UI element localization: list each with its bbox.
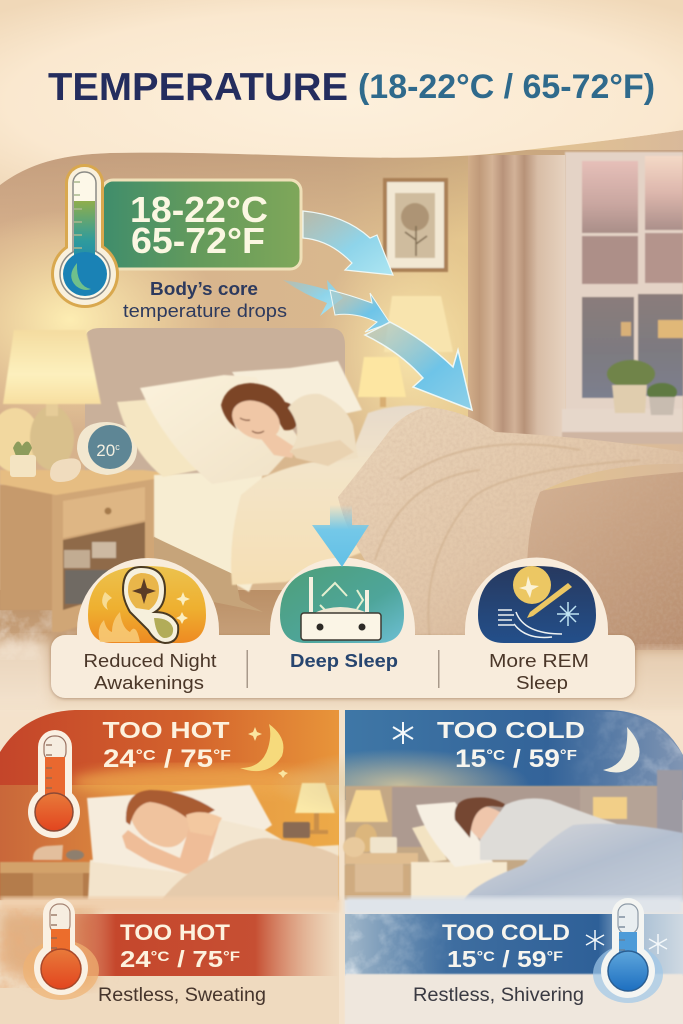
heading: too cold top: 15 [455,745,483,773]
caption: restless sweating: Restless, Sweating [98,984,266,1006]
top banner [0,0,683,185]
benefit: deep sleep: Deep Sleep [290,651,398,671]
benefit: reduced night awakenings: Reduced Night [84,651,216,671]
heading: too hot top: 24 [103,745,131,773]
cold sky [345,710,683,800]
heading: too cold top: TOO COLD [437,717,585,743]
cold sky frost [560,712,683,795]
benefit: more REM sleep: Sleep [516,673,568,693]
bed base [154,537,263,612]
heading: too hot lower: / 75 [169,946,223,972]
icon: cold moon [603,727,640,772]
arrow: down to deep sleep [312,505,369,567]
alarm clock: 20 [96,441,115,460]
bedside lamp [0,330,101,472]
arrow: small [283,280,343,316]
hot band [60,914,339,976]
caption: body core temperature: Body’s core [150,279,258,299]
floor [0,590,683,710]
hot sky [0,710,339,800]
mattress [154,470,262,592]
hot stars [248,727,288,778]
benefit: more REM sleep [465,557,608,693]
bedroom scene [0,130,683,710]
small plant [10,441,36,477]
heading: too cold top [437,717,585,773]
heading: too cold top: / 59 [505,745,560,773]
hot room [0,785,339,900]
icon: snowflake [393,722,413,744]
panel background [51,635,635,698]
hot bed [87,785,339,902]
icon: main thermometer [51,164,119,308]
alarm clock [77,422,137,475]
panel: too hot [0,710,339,1024]
heading: too hot top: TOO HOT [102,717,230,743]
window [562,152,683,444]
green temperature box: 18-22°C [130,189,268,230]
panel: too cold [270,710,683,1024]
heading: too cold lower: °F [547,948,564,964]
lower hot wash [0,912,95,986]
floor mist [0,640,50,710]
range badge [51,164,301,321]
heading: too hot top [102,717,231,773]
heading: too cold top: °C [486,747,505,764]
heading: too hot lower: 24 [120,946,146,972]
wall [0,130,683,660]
heading: too hot lower: °C [151,948,169,964]
spread on bed [470,472,683,650]
heading: too hot lower [120,920,241,972]
heading: too hot top: °F [213,747,231,764]
title [48,66,655,109]
hot glow [70,766,330,798]
icon: hot moon [240,724,283,771]
benefit: reduced night awakenings: Awakenings [94,673,204,693]
heading: too hot top: / 75 [156,745,213,773]
duvet [231,405,440,585]
cold frost [345,914,455,976]
lower hot mottling [0,908,120,988]
cold mist [345,897,683,914]
soft toy [50,458,81,482]
alarm clock: c [115,442,120,452]
pillows [117,361,362,484]
benefits panel [51,557,635,698]
title: TEMPERATURE [48,66,348,109]
arrow: medium [330,290,390,332]
wall top shading [0,150,683,240]
icon: hot thermometer lower [23,898,99,1000]
green temperature box [102,180,301,269]
wall glow right [315,230,505,470]
heading: too cold top: °F [560,747,577,764]
arrow: large [365,322,472,410]
caption: restless shivering: Restless, Shivering [413,984,584,1006]
cold nightstand [343,837,418,899]
nightstand [0,470,160,632]
window plants [607,360,677,415]
green temperature box: 65-72°F [131,220,265,261]
curtains [468,155,565,440]
background lamps [358,296,453,407]
tan blanket [338,407,683,650]
hot nightstand [0,845,95,900]
sleeping woman [221,383,358,466]
cold bed [411,797,683,902]
caption: body core temperature [123,279,287,321]
benefit: deep sleep [270,558,415,671]
floor texture [0,610,110,660]
icon: small snowflakes [586,930,667,954]
lamp glow on wall [0,210,220,430]
heading: too hot top: °C [136,747,156,764]
icon: hot thermometer top [28,730,80,838]
heading: too hot lower: °F [223,948,241,964]
cold room [345,770,683,900]
cold horizon [270,749,530,821]
benefit: more REM sleep: More REM [489,651,589,671]
benefit: reduced night awakenings [77,558,219,693]
cold lamps [345,790,627,852]
lower snow [345,974,683,1024]
hot lamp [283,783,335,838]
hot mist [0,897,339,912]
heading: too hot lower: TOO HOT [120,920,231,945]
heading: too cold lower: °C [477,948,495,964]
picture frame [383,178,448,272]
cold panel background [345,710,683,1024]
caption: body core temperature: temperature drops [123,301,287,321]
cold band [345,914,683,976]
heading: too cold lower: TOO COLD [442,920,570,945]
headboard [85,328,345,520]
heading: too cold lower: / 59 [495,946,547,972]
title: (18-22°C / 65-72°F) [358,68,655,106]
floor mist right [635,650,683,710]
arrow: top curved [303,211,393,275]
icon: cold thermometer [593,898,663,1003]
hot panel background [0,710,339,1024]
heading: too cold lower: 15 [447,946,473,972]
heading: too cold lower [442,920,570,972]
arrows [283,211,472,410]
